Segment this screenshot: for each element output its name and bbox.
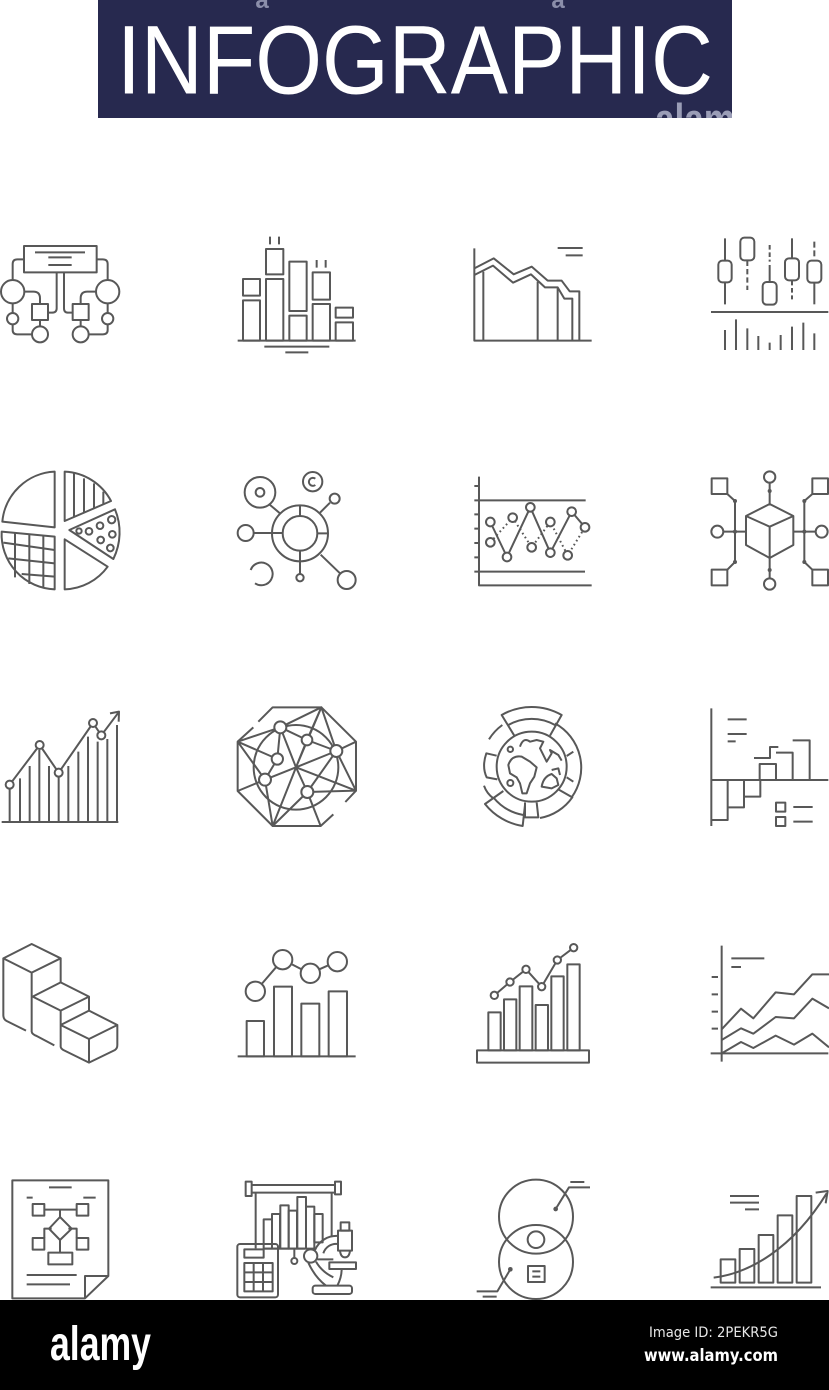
- alamy logo: alamy: [50, 1318, 151, 1371]
- icon: pie chart: [2, 472, 120, 589]
- icon: waterfall chart: [711, 708, 828, 826]
- icon: globe ring chart: [484, 707, 581, 826]
- icon: geodesic globe: [238, 707, 356, 826]
- icon: bars on base with dotted line: [477, 944, 589, 1063]
- icon: flow diagram: [1, 246, 119, 342]
- icon: rising bars with arrow: [2, 712, 119, 822]
- icon: multi-line area chart: [711, 946, 829, 1062]
- icon: network nodes: [238, 472, 356, 589]
- icon: declining area chart: [474, 248, 592, 341]
- title text: INFOGRAPHIC: [117, 6, 713, 114]
- website: www.alamy.com: [644, 1346, 778, 1365]
- icon: stacked bar chart: [238, 237, 356, 352]
- image id: Image ID: 2PEKR5G: [649, 1325, 778, 1341]
- icon: stacked cubes: [3, 944, 117, 1063]
- icon: cube network: [711, 471, 828, 590]
- icon: presentation board, calculator and microscope: [237, 1182, 356, 1297]
- icon: flowchart document: [12, 1180, 108, 1298]
- icon: growth bars with arrow: [711, 1191, 828, 1287]
- title banner: [98, 0, 732, 118]
- icon: venn diagram: [477, 1180, 590, 1299]
- icon: bars with trend line: [238, 950, 356, 1056]
- icon: zigzag line chart: [474, 477, 592, 585]
- title banner: alam: [655, 95, 735, 144]
- footer bar: [0, 1300, 829, 1390]
- icon: candlestick chart: [711, 238, 828, 350]
